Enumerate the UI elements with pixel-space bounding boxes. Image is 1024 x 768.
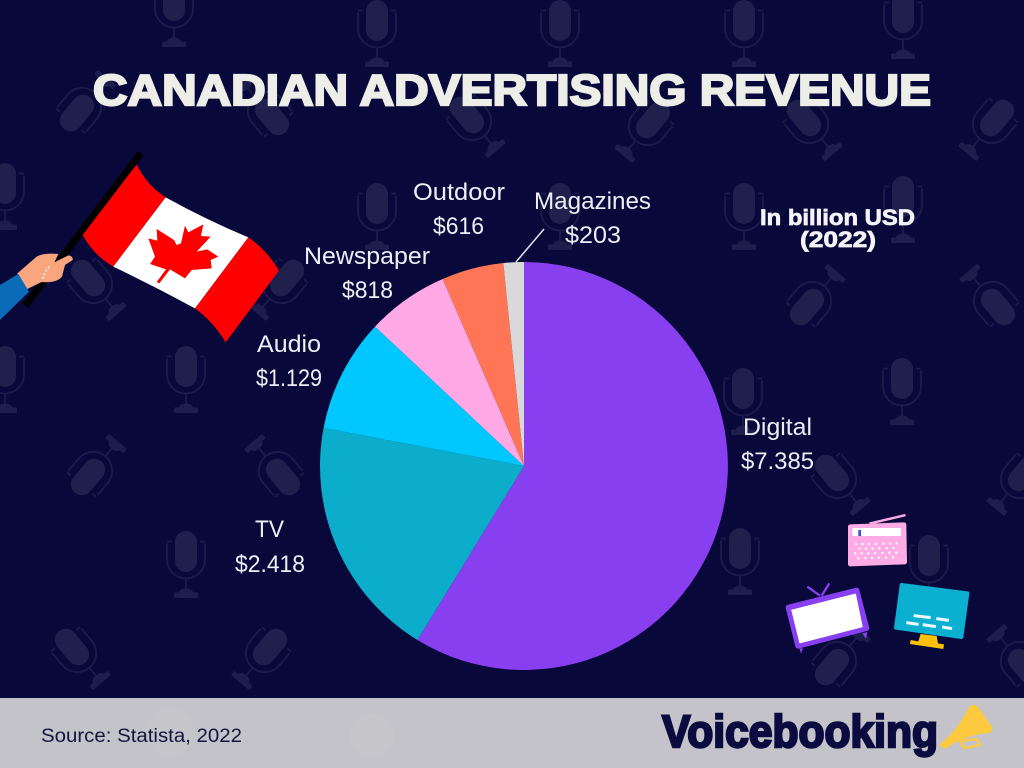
flag pole (25, 153, 141, 306)
slice: Outdoor (443, 263, 524, 466)
label: Audio: Audio (257, 331, 321, 358)
hand (17, 254, 73, 291)
maple leaf (148, 224, 218, 283)
label: Outdoor: $616 (433, 213, 484, 240)
label: TV (235, 516, 305, 578)
slice: Newspaper (375, 279, 524, 466)
icon: megaphone (939, 705, 992, 749)
label: Digital (741, 414, 814, 475)
logo: Voicebooking: Voicebooking (662, 706, 938, 757)
label: Audio (256, 331, 322, 392)
leader line: Magazines (516, 229, 544, 262)
radio (850, 514, 905, 564)
title: CANADIAN ADVERTISING REVENUE (93, 66, 931, 115)
label: TV: $2.418 (235, 551, 305, 578)
label: Newspaper: Newspaper (304, 243, 430, 270)
label: Outdoor (413, 179, 505, 240)
label: TV: TV (255, 516, 284, 543)
unit note (760, 205, 915, 252)
label: Digital: $7.385 (741, 448, 814, 475)
illustration: media devices (788, 514, 967, 654)
flag right red band (195, 237, 279, 342)
pie chart (320, 262, 728, 670)
slice: Digital (417, 262, 728, 670)
footer band (0, 698, 1024, 768)
finger highlights (43, 267, 49, 279)
slice: Audio (324, 327, 524, 466)
label: Newspaper (304, 243, 430, 304)
unit note: (2022) (800, 227, 876, 252)
label: Magazines: Magazines (534, 188, 651, 215)
label: Magazines (534, 188, 651, 249)
slice: TV (320, 428, 524, 640)
sleeve (0, 274, 29, 320)
computer monitor (896, 585, 967, 649)
label: Magazines: $203 (565, 222, 621, 249)
television (788, 583, 867, 654)
label: Outdoor: Outdoor (413, 179, 505, 206)
label: Newspaper: $818 (342, 277, 393, 304)
source: Source: Statista, 2022 (41, 726, 242, 747)
slice: Magazines (503, 262, 524, 466)
flag white band (113, 197, 248, 308)
label: Audio: $1.129 (256, 365, 322, 392)
label: Digital: Digital (743, 414, 812, 441)
flag left red band (83, 164, 166, 267)
illustration: hand waving Canadian flag (0, 153, 279, 342)
unit note: In billion USD (760, 205, 915, 230)
